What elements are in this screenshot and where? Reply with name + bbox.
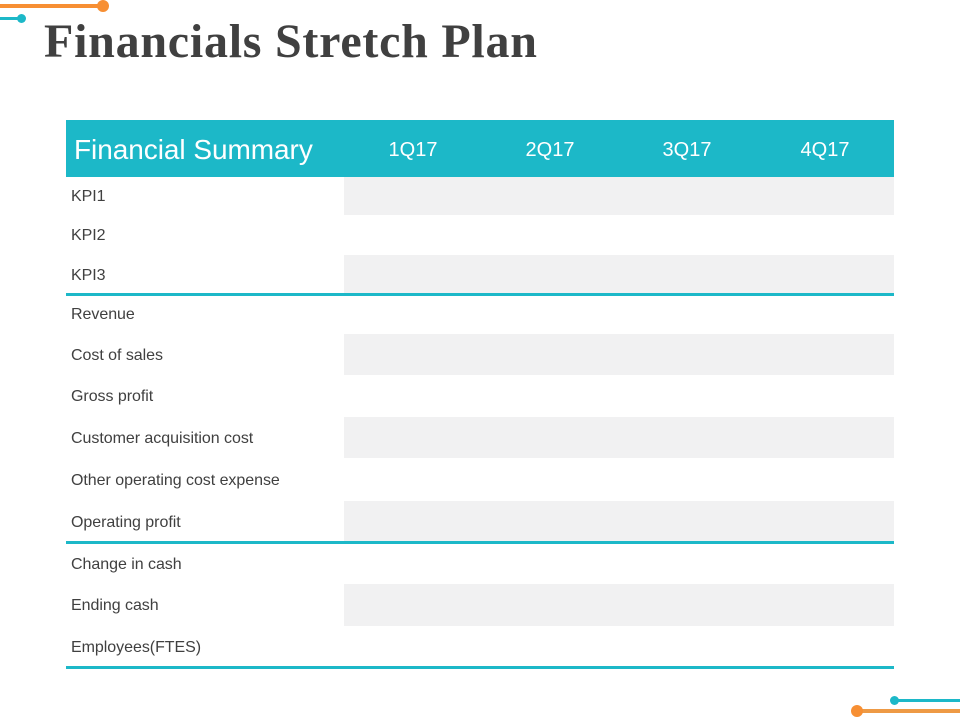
icon: bottom-right orange connector [851, 705, 960, 717]
row label: KPI1: KPI1 [71, 188, 106, 205]
row label: Other operating cost expense: Other operating cost expense [71, 472, 280, 489]
row label: Change in cash: Change in cash [71, 556, 182, 573]
icon: top-left orange connector [0, 0, 109, 12]
row label: Ending cash: Ending cash [71, 597, 159, 614]
table header bar [66, 120, 894, 177]
header: 3Q17: 3Q17 [663, 139, 711, 161]
header: 1Q17: 1Q17 [389, 139, 437, 161]
header: 4Q17: 4Q17 [801, 139, 849, 161]
row divider after operating profit [66, 541, 894, 544]
icon: bottom-right teal connector [890, 696, 960, 705]
shaded row: KPI3 [344, 255, 894, 293]
row label: Customer acquisition cost: Customer acquisition cost [71, 430, 253, 447]
header: 2Q17: 2Q17 [526, 139, 574, 161]
row label: Gross profit: Gross profit [71, 388, 153, 405]
row label: KPI2: KPI2 [71, 227, 106, 244]
shaded row: Cost of sales [344, 334, 894, 375]
row divider after KPIs [66, 293, 894, 296]
row divider at table bottom [66, 666, 894, 669]
row label: Operating profit: Operating profit [71, 514, 181, 531]
row label: Employees(FTES): Employees(FTES) [71, 639, 201, 656]
header: Financial Summary: Financial Summary [74, 134, 313, 165]
title: Financials Stretch Plan [44, 15, 538, 68]
row label: KPI3: KPI3 [71, 267, 106, 284]
icon: top-left teal connector [0, 14, 26, 23]
shaded row: Customer acquisition cost [344, 417, 894, 458]
row label: Cost of sales: Cost of sales [71, 347, 163, 364]
shaded row: Ending cash [344, 584, 894, 626]
shaded row: Operating profit [344, 501, 894, 542]
shaded row: KPI1 [344, 177, 894, 215]
row label: Revenue: Revenue [71, 306, 135, 323]
